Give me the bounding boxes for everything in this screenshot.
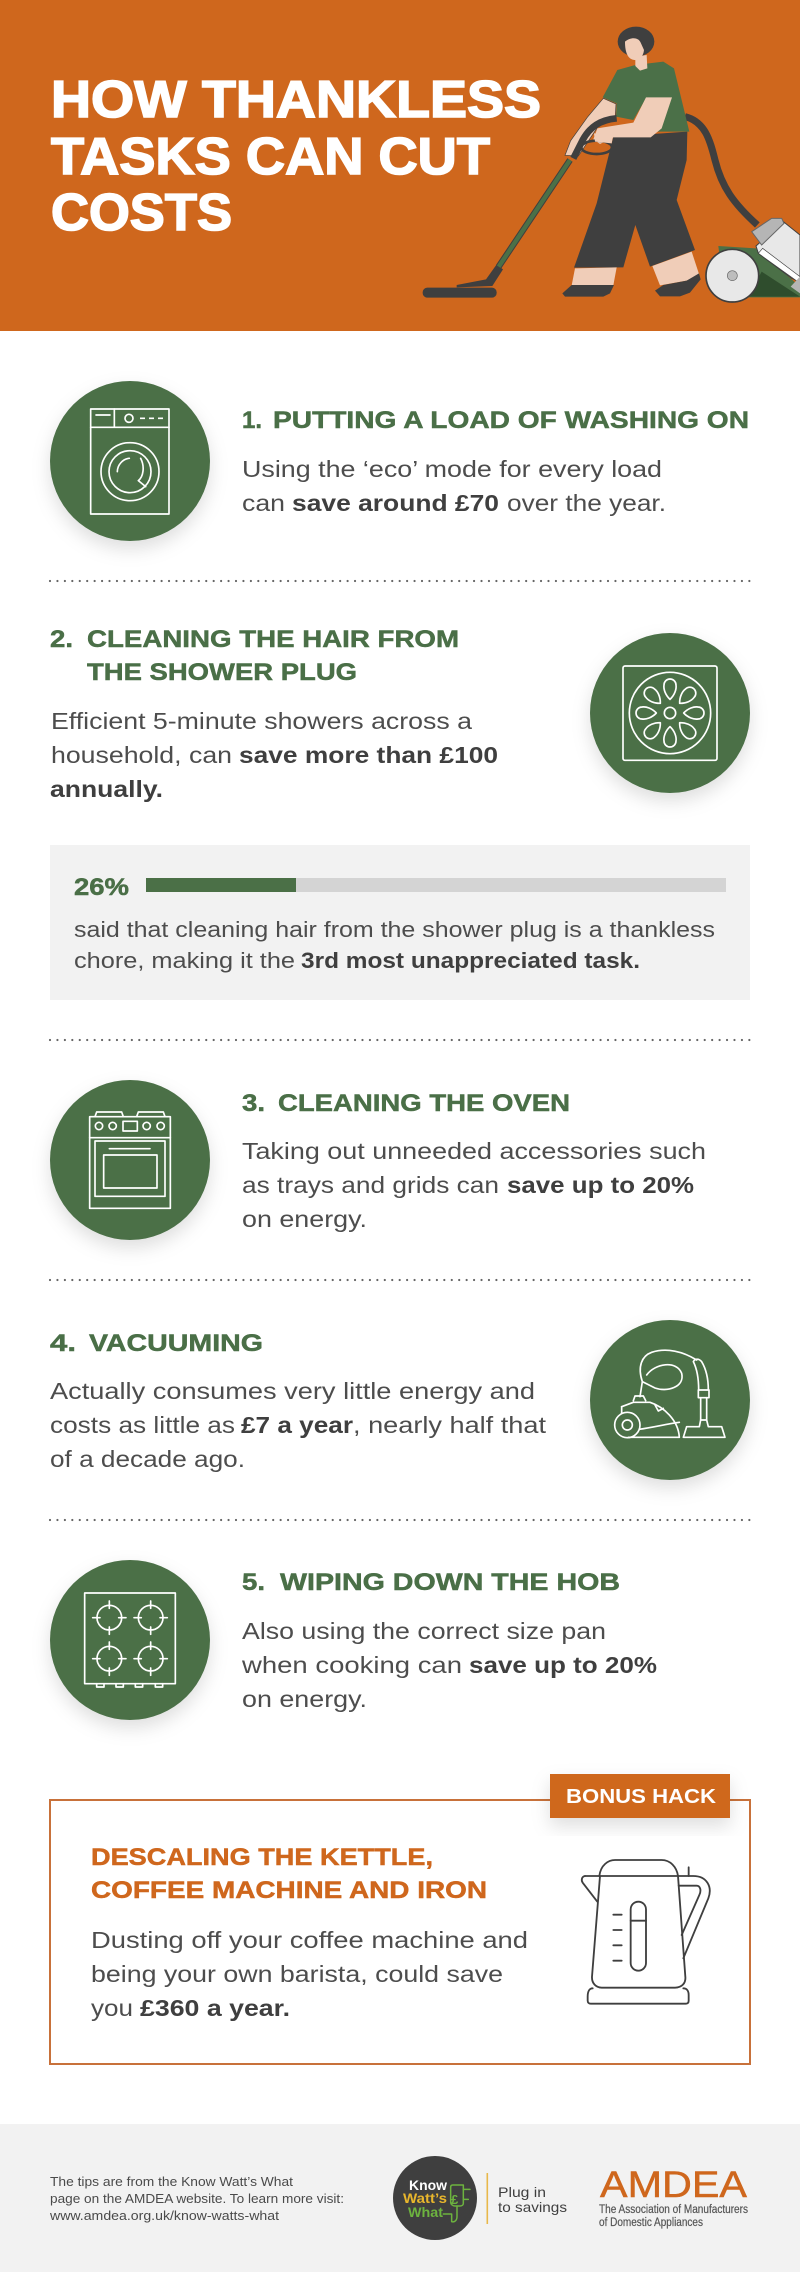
title: HOW THANKLESS [51,70,541,128]
text 5 [241,1618,657,1712]
logo: AMDEA: AMDEA [600,2163,747,2205]
heading 1: 1. [242,407,262,434]
text 1: save around £70 [292,490,499,516]
text 5: when cooking can [241,1652,462,1678]
footer panel [0,2124,800,2272]
stat text: chore, making it the [74,948,295,973]
heading 5: WIPING DOWN THE HOB [280,1569,620,1596]
item 5: hob [50,1560,657,1720]
item 4: vacuuming [50,1320,750,1480]
title [51,70,541,241]
tagline: to savings [498,2199,567,2215]
text 4: Actually consumes very little energy and [50,1378,535,1404]
title: COSTS [51,183,232,241]
heading 3: 3. [242,1090,265,1117]
icon: washing machine [50,381,210,541]
title: TASKS CAN CUT [51,127,490,185]
icon: hob [50,1560,210,1720]
text 3: Taking out unneeded accessories such [242,1138,706,1164]
text 4: costs as little as [50,1412,235,1438]
text 5: Also using the correct size pan [242,1618,606,1644]
text 2: save more than £100 [239,742,498,768]
stat text: 3rd most unappreciated task. [301,948,640,973]
bonus text: being your own barista, could save [91,1961,503,1987]
footer note: The tips are from the Know Watt’s What [50,2175,294,2189]
logo: Know Watt's What: £ [451,2192,459,2207]
text 3 [242,1138,706,1232]
text 3: save up to 20% [507,1172,694,1198]
bonus text: you [91,1995,133,2021]
bonus text: £360 a year. [140,1995,290,2021]
heading 4: VACUUMING [89,1330,263,1357]
logo: AMDEA: of Domestic Appliances [599,2217,703,2229]
tagline [498,2184,567,2215]
footer note [49,2175,344,2223]
heading 2 [50,626,459,686]
bonus text: Dusting off your coffee machine and [91,1927,528,1953]
logo: Know Watt's What [393,2156,477,2240]
progress bar [146,878,726,892]
icon: shower drain [590,633,750,793]
text 4 [50,1378,547,1472]
item 3: oven [50,1080,706,1240]
text 5: on energy. [242,1686,367,1712]
icon: vacuum cleaner [590,1320,750,1480]
text 1 [242,456,666,516]
heading 2: 2. [50,626,73,653]
item 1: washing [50,381,749,541]
heading 2: THE SHOWER PLUG [87,659,357,686]
illustration: person vacuuming [423,27,800,302]
text 1: over the year. [507,490,666,516]
text 2 [50,708,498,802]
bonus tag: BONUS HACK [566,1785,716,1808]
stat value: 26% [74,874,129,901]
logo: AMDEA [599,2163,748,2229]
bonus heading [91,1844,487,1904]
text 3: as trays and grids can [242,1172,499,1198]
heading 3: CLEANING THE OVEN [278,1090,570,1117]
stat text [74,917,715,973]
tagline: Plug in [498,2184,546,2200]
icon: oven [50,1080,210,1240]
text 4: £7 a year [241,1412,353,1438]
logo: Know Watt's What: Watt’s [403,2191,447,2206]
logo: Know Watt's What: What [408,2205,444,2220]
text 2: annually. [50,776,163,802]
divider [486,2173,488,2224]
text 1: Using the ‘eco’ mode for every load [242,456,662,482]
heading 4: 4. [50,1330,76,1357]
text 1: can [242,490,285,516]
heading 1: PUTTING A LOAD OF WASHING ON [273,407,749,434]
text 2: Efficient 5-minute showers across a [51,708,472,734]
text 5: save up to 20% [469,1652,657,1678]
logo: AMDEA: The Association of Manufacturers [599,2204,748,2216]
text 2: household, can [51,742,232,768]
bonus tag [550,1774,730,1818]
text 4: , nearly half that [353,1412,547,1438]
stat text: said that cleaning hair from the shower plug is a thankless [74,917,715,942]
text 4: of a decade ago. [50,1446,245,1472]
icon: kettle [582,1860,710,2004]
footer note: www.amdea.org.uk/know-watts-what [49,2209,280,2223]
stat panel: 26% [50,845,750,1000]
heading 5: 5. [242,1569,265,1596]
bonus heading: DESCALING THE KETTLE, [91,1844,433,1871]
bonus text [91,1927,528,2021]
panel: bonus hack [50,1774,750,2064]
logo: Know Watt's What: Know [409,2178,448,2193]
text 3: on energy. [242,1206,367,1232]
header panel [0,0,800,331]
footer note: page on the AMDEA website. To learn more visit: [50,2192,344,2206]
heading 2: CLEANING THE HAIR FROM [87,626,459,653]
bonus heading: COFFEE MACHINE AND IRON [91,1877,487,1904]
item 2: shower plug [50,626,750,1000]
